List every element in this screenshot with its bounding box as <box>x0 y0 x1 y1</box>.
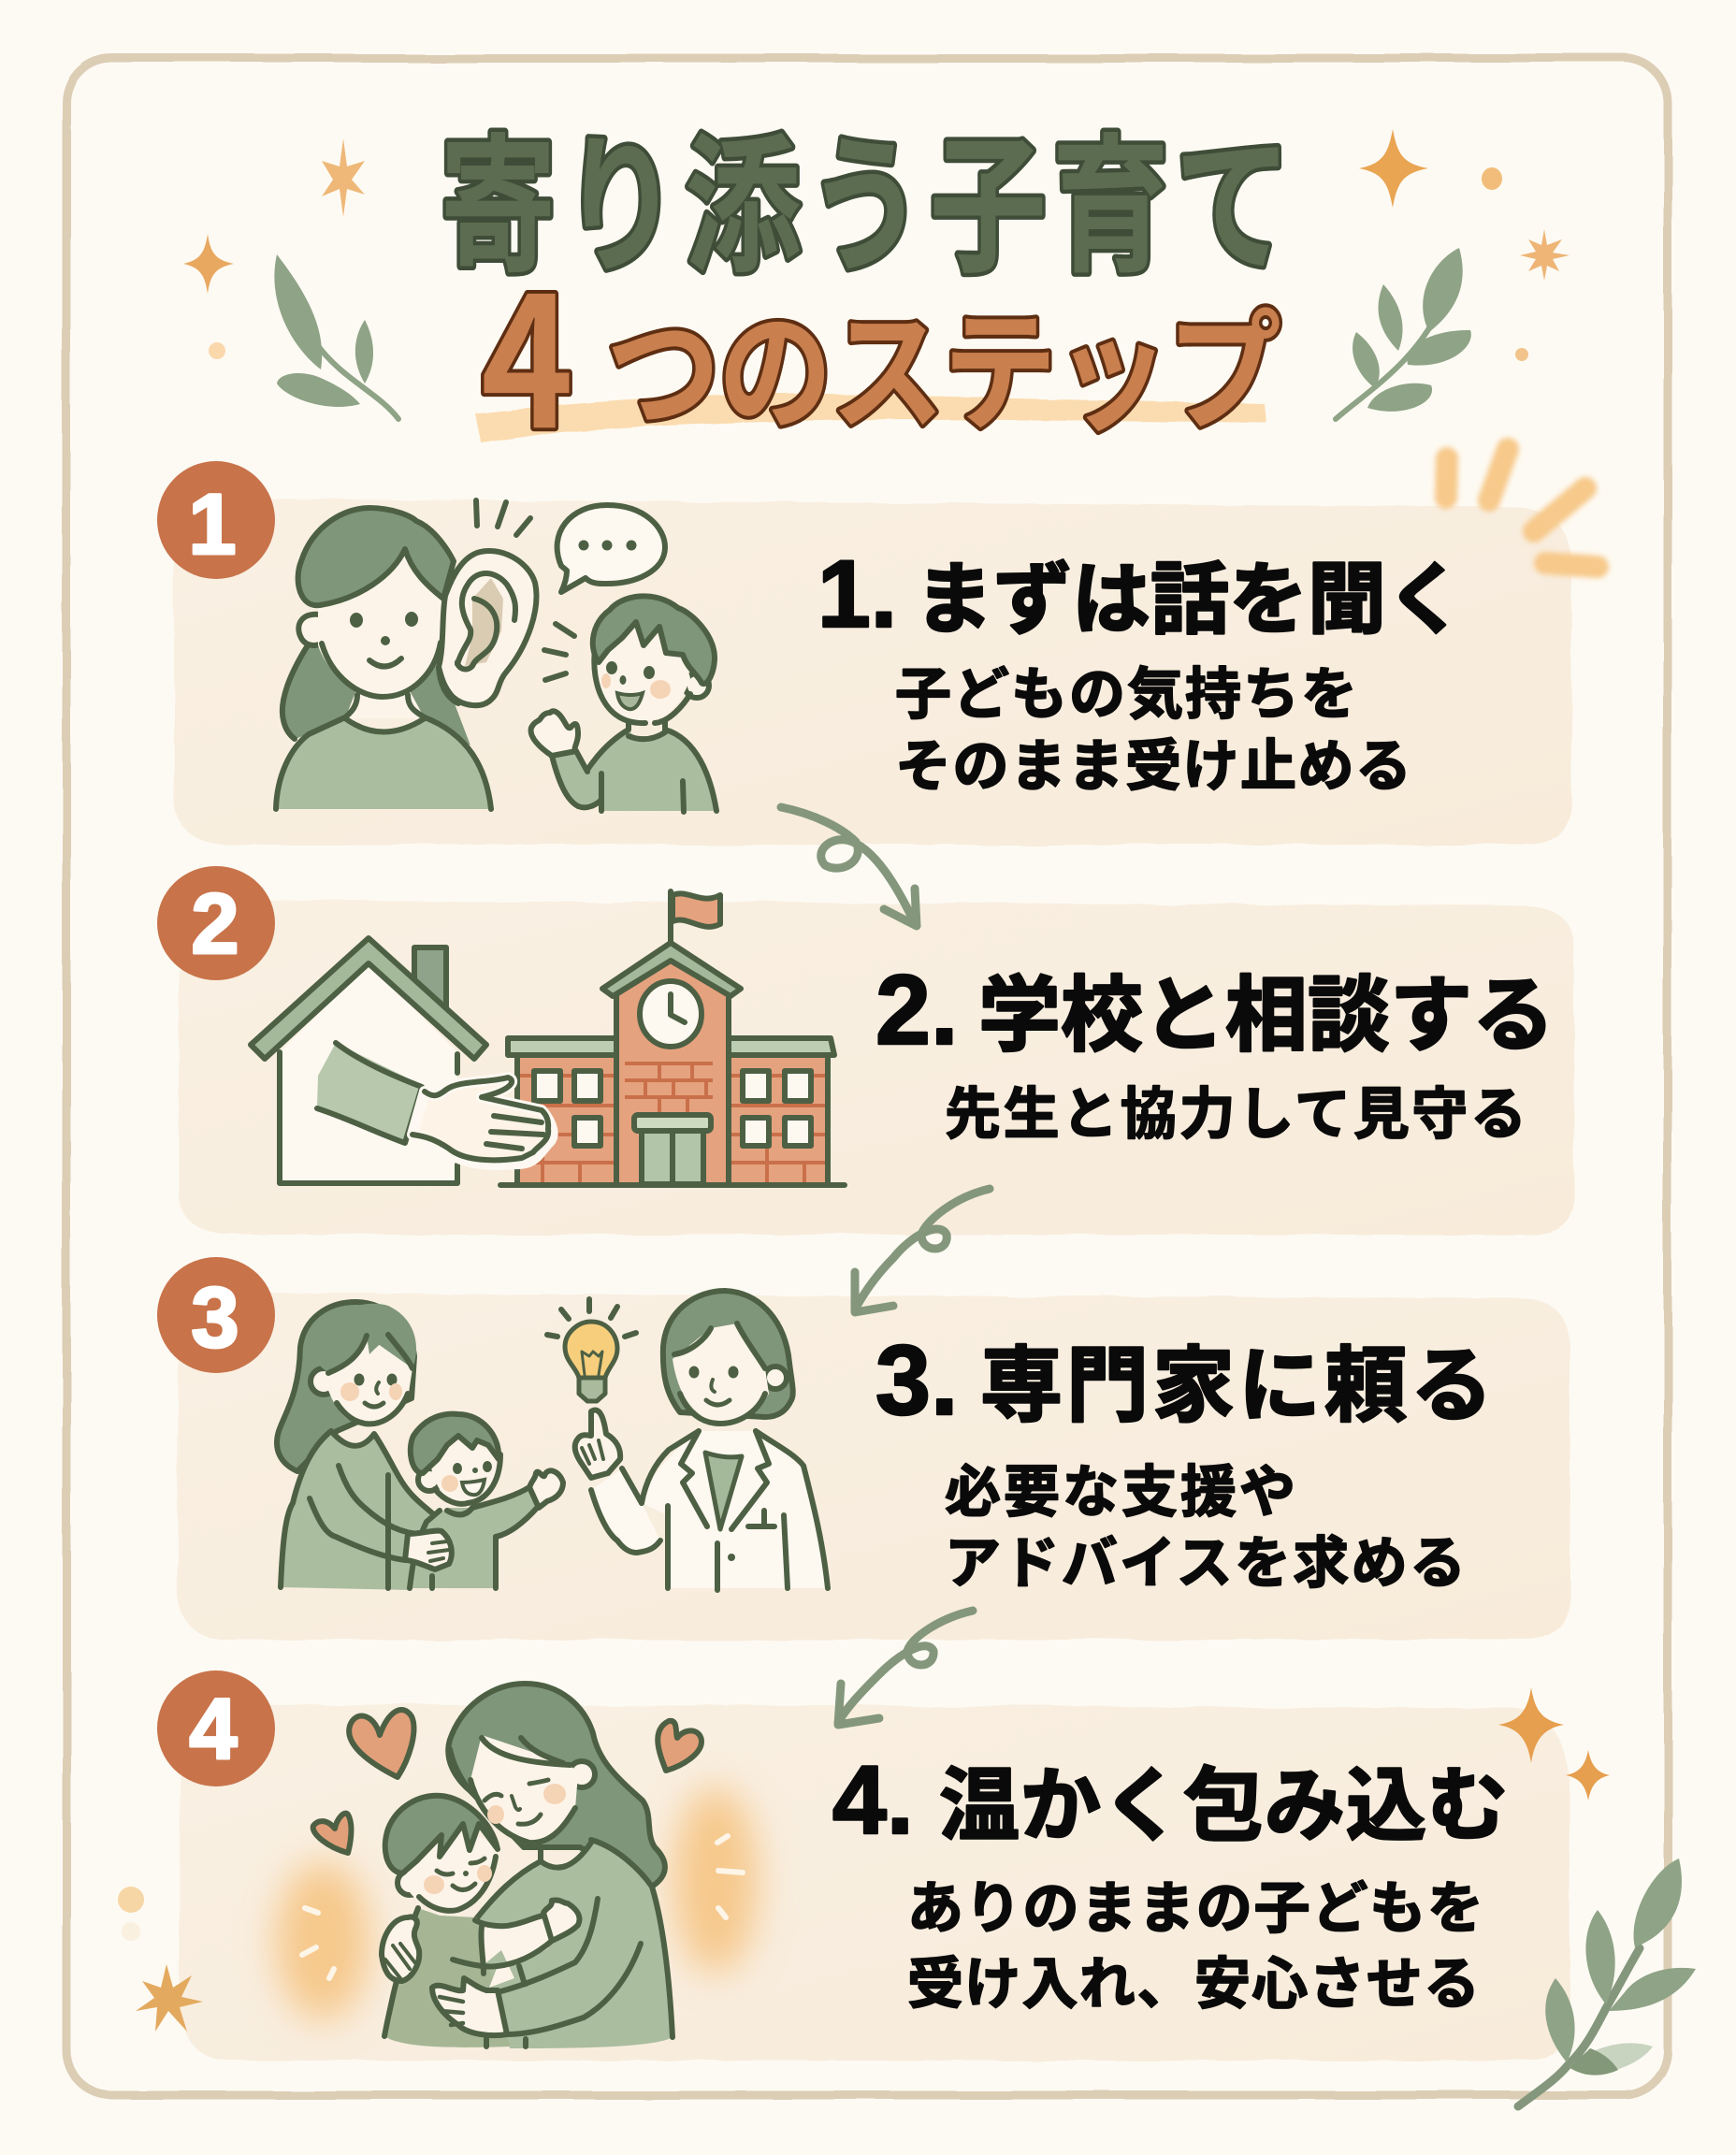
listening marks <box>476 500 530 535</box>
heading 3: 専門家に頼る <box>980 1339 1497 1432</box>
heading 3: 3. <box>875 1325 958 1436</box>
panel: step 2 <box>157 866 1574 1235</box>
title underline highlight <box>475 394 1266 443</box>
illustration: mother and child <box>277 1302 563 1590</box>
speech bubble <box>557 505 665 592</box>
heading 1: 1. <box>817 541 897 647</box>
title line 2: 4 <box>481 219 571 481</box>
bottom left decorations <box>118 1887 203 2032</box>
description 1 line 1: 子どもの気持ちを <box>895 663 1357 726</box>
child in arms <box>384 1796 510 2047</box>
dot right small <box>1515 348 1528 361</box>
illustration: mother hugging child <box>382 1684 673 2048</box>
number badge 2 <box>157 866 275 980</box>
mother hand <box>405 1531 452 1569</box>
glow sparkles <box>302 1836 743 1978</box>
arrow: step 2 to 3 <box>855 1189 990 1312</box>
description 3 line 1: 必要な支援や <box>945 1461 1295 1524</box>
small sparkle <box>1566 1750 1610 1801</box>
description 4 line 1: ありのままの子どもを <box>907 1877 1483 1940</box>
leaf sprig left <box>274 254 398 419</box>
number badge 3 <box>157 1257 275 1373</box>
bottom right sparkles <box>1498 1687 1610 1801</box>
embracing arms <box>382 1899 641 2035</box>
mother hair <box>298 508 454 605</box>
leaf branch bottom right <box>1518 1859 1696 2106</box>
description 4 line 2: 受け入れ、安心させる <box>907 1953 1480 2016</box>
illustration: mother listening <box>276 500 716 812</box>
dot right <box>1482 167 1502 190</box>
big ear <box>439 551 536 705</box>
heading 4: 温かく包み込む <box>939 1761 1509 1851</box>
description 1 line 2: そのまま受け止める <box>895 735 1411 798</box>
star right <box>1520 229 1570 281</box>
sparkle top right <box>1359 129 1428 208</box>
number badge 4: 4 <box>189 1682 238 1777</box>
panel: step 3 <box>157 1257 1570 1640</box>
title line 1: 寄り添う子育て <box>440 86 1297 303</box>
reaching hand <box>317 1043 553 1164</box>
hearts <box>313 1710 702 1853</box>
faint dot <box>122 1922 140 1941</box>
illustration: doctor <box>575 1291 828 1590</box>
panel 4 background <box>180 1704 1570 2061</box>
number badge 2: 2 <box>191 876 239 972</box>
arrow: step 3 to 4 <box>838 1611 973 1725</box>
star <box>136 1964 203 2032</box>
warm glow left <box>276 1861 369 2020</box>
pointing hand <box>575 1410 620 1478</box>
description 2: 先生と協力して見守る <box>945 1083 1526 1146</box>
sun rays decoration <box>1446 449 1598 567</box>
sound lines <box>544 624 574 680</box>
panel: step 1 <box>157 461 1571 845</box>
illustration: house and school <box>251 891 845 1185</box>
mother face <box>298 549 445 697</box>
child waving <box>531 596 716 812</box>
number badge 1 <box>157 461 275 579</box>
child <box>410 1414 563 1588</box>
arrow: step 1 to 2 <box>781 807 917 926</box>
mother body <box>276 687 491 809</box>
school <box>500 891 845 1185</box>
description 3 line 2: アドバイスを求める <box>945 1532 1466 1595</box>
number badge 4 <box>157 1670 275 1786</box>
leaf sprig right <box>1336 248 1471 419</box>
number badge 1: 1 <box>188 477 237 572</box>
panel 2 background <box>179 900 1574 1235</box>
number badge 3: 3 <box>191 1270 239 1366</box>
star left <box>322 138 365 217</box>
heading 4: 4. <box>832 1746 914 1855</box>
warm glow right <box>673 1786 758 1974</box>
header decorations <box>183 129 1570 419</box>
icon: light bulb <box>547 1299 636 1401</box>
title <box>440 86 1297 481</box>
heading 2: 2. <box>875 955 958 1065</box>
dot left <box>209 342 225 359</box>
house <box>251 938 486 1183</box>
heading 2: 学校と相談する <box>978 969 1555 1062</box>
dot <box>118 1887 144 1913</box>
heading 1: まずは話を聞く <box>915 556 1465 644</box>
panel 1 background <box>174 499 1571 845</box>
panel: step 4 <box>157 1670 1570 2061</box>
panel 3 background <box>178 1293 1570 1640</box>
sparkle left <box>183 234 234 294</box>
large sparkle <box>1498 1687 1564 1763</box>
title line 2: つのステップ <box>606 268 1280 457</box>
